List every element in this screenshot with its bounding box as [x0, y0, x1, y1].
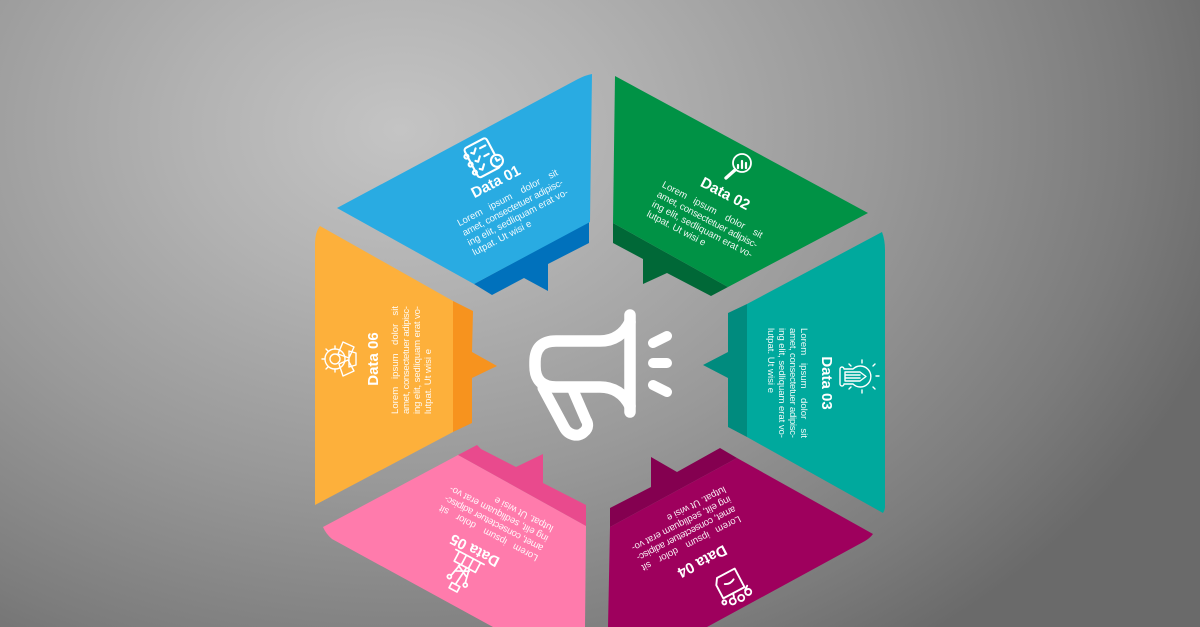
text block: Lorem: [390, 387, 401, 414]
text block: amet, consectetuer adipisc-: [461, 177, 565, 239]
text block: Lorem: [660, 180, 689, 202]
panel: data 04: [608, 448, 873, 627]
text block: ipsum: [487, 191, 514, 213]
text block: sit: [798, 428, 809, 438]
text block: ing elit, sedliquam erat vo-: [776, 328, 787, 438]
heading: Data 05: [447, 530, 503, 570]
text block: lutpat. Ut wisi e: [765, 328, 776, 393]
panel: data 02: [613, 76, 868, 296]
heading: Data 02: [697, 174, 753, 214]
text block: lutpat. Ut wisi e: [665, 484, 728, 523]
text block: dolor: [453, 511, 478, 531]
text block: lutpat. Ut wisi e: [493, 494, 555, 534]
text block: amet, consectetuer adipisc-: [635, 503, 738, 563]
heading: Data 01: [468, 162, 524, 202]
icon: central megaphone: [535, 315, 667, 435]
text block: ing elit, sedliquam erat vo-: [448, 483, 550, 544]
text block: [437, 473, 555, 563]
heading: Data 06: [365, 332, 382, 386]
text block: [456, 167, 576, 258]
text block: ing elit, sedliquam erat vo-: [412, 306, 423, 414]
text block: sit: [390, 306, 401, 316]
text block: lutpat. Ut wisi e: [471, 218, 534, 258]
icon: tool on stand: [438, 549, 484, 597]
icon: document with gears: [711, 567, 753, 610]
icon: checklist: [461, 135, 506, 180]
text block: ing elit, sedliquam erat vo-: [466, 187, 570, 249]
text block: Lorem: [511, 541, 540, 563]
panel: data 05: [323, 445, 586, 627]
text block: [645, 180, 765, 270]
text block: dolor: [798, 398, 809, 420]
text block: sit: [751, 227, 765, 241]
text block: ipsum: [684, 529, 711, 550]
text block: lutpat. Ut wisi e: [645, 209, 707, 249]
text block: Lorem: [798, 328, 809, 355]
text block: ing elit, sedliquam erat vo-: [630, 493, 733, 553]
text block: ipsum: [691, 196, 719, 217]
text block: ipsum: [798, 363, 809, 389]
text block: sit: [437, 502, 451, 517]
heading: Data 03: [818, 356, 835, 410]
text block: ipsum: [481, 525, 509, 547]
text block: sit: [546, 167, 560, 182]
text block: amet, consectetuer adipisc-: [443, 493, 545, 553]
text block: lutpat. Ut wisi e: [423, 349, 434, 414]
icon: gear and hand: [322, 342, 356, 376]
text block: [765, 328, 809, 438]
text block: dolor: [519, 176, 543, 196]
text block: ing elit, sedliquam erat vo-: [650, 199, 754, 261]
text block: sit: [639, 559, 653, 573]
panel: data 06: [315, 226, 497, 505]
text block: [624, 484, 743, 573]
panel: data 03: [703, 232, 885, 513]
text block: dolor: [655, 545, 680, 565]
heading: Data 04: [674, 541, 730, 581]
panel: data 01: [337, 74, 592, 295]
text block: amet, consectetuer adipisc-: [401, 306, 412, 414]
icon: magnifier chart: [726, 154, 751, 178]
text block: Lorem: [713, 513, 743, 535]
text block: dolor: [723, 212, 748, 232]
text block: Lorem: [456, 207, 485, 229]
text block: amet, consectetuer adipisc-: [787, 328, 798, 438]
text block: ipsum: [390, 353, 401, 379]
text block: dolor: [390, 323, 401, 345]
text block: amet, consectetuer adipisc-: [655, 189, 759, 251]
text block: [390, 306, 434, 414]
icon: light bulb with pencil: [840, 360, 879, 393]
